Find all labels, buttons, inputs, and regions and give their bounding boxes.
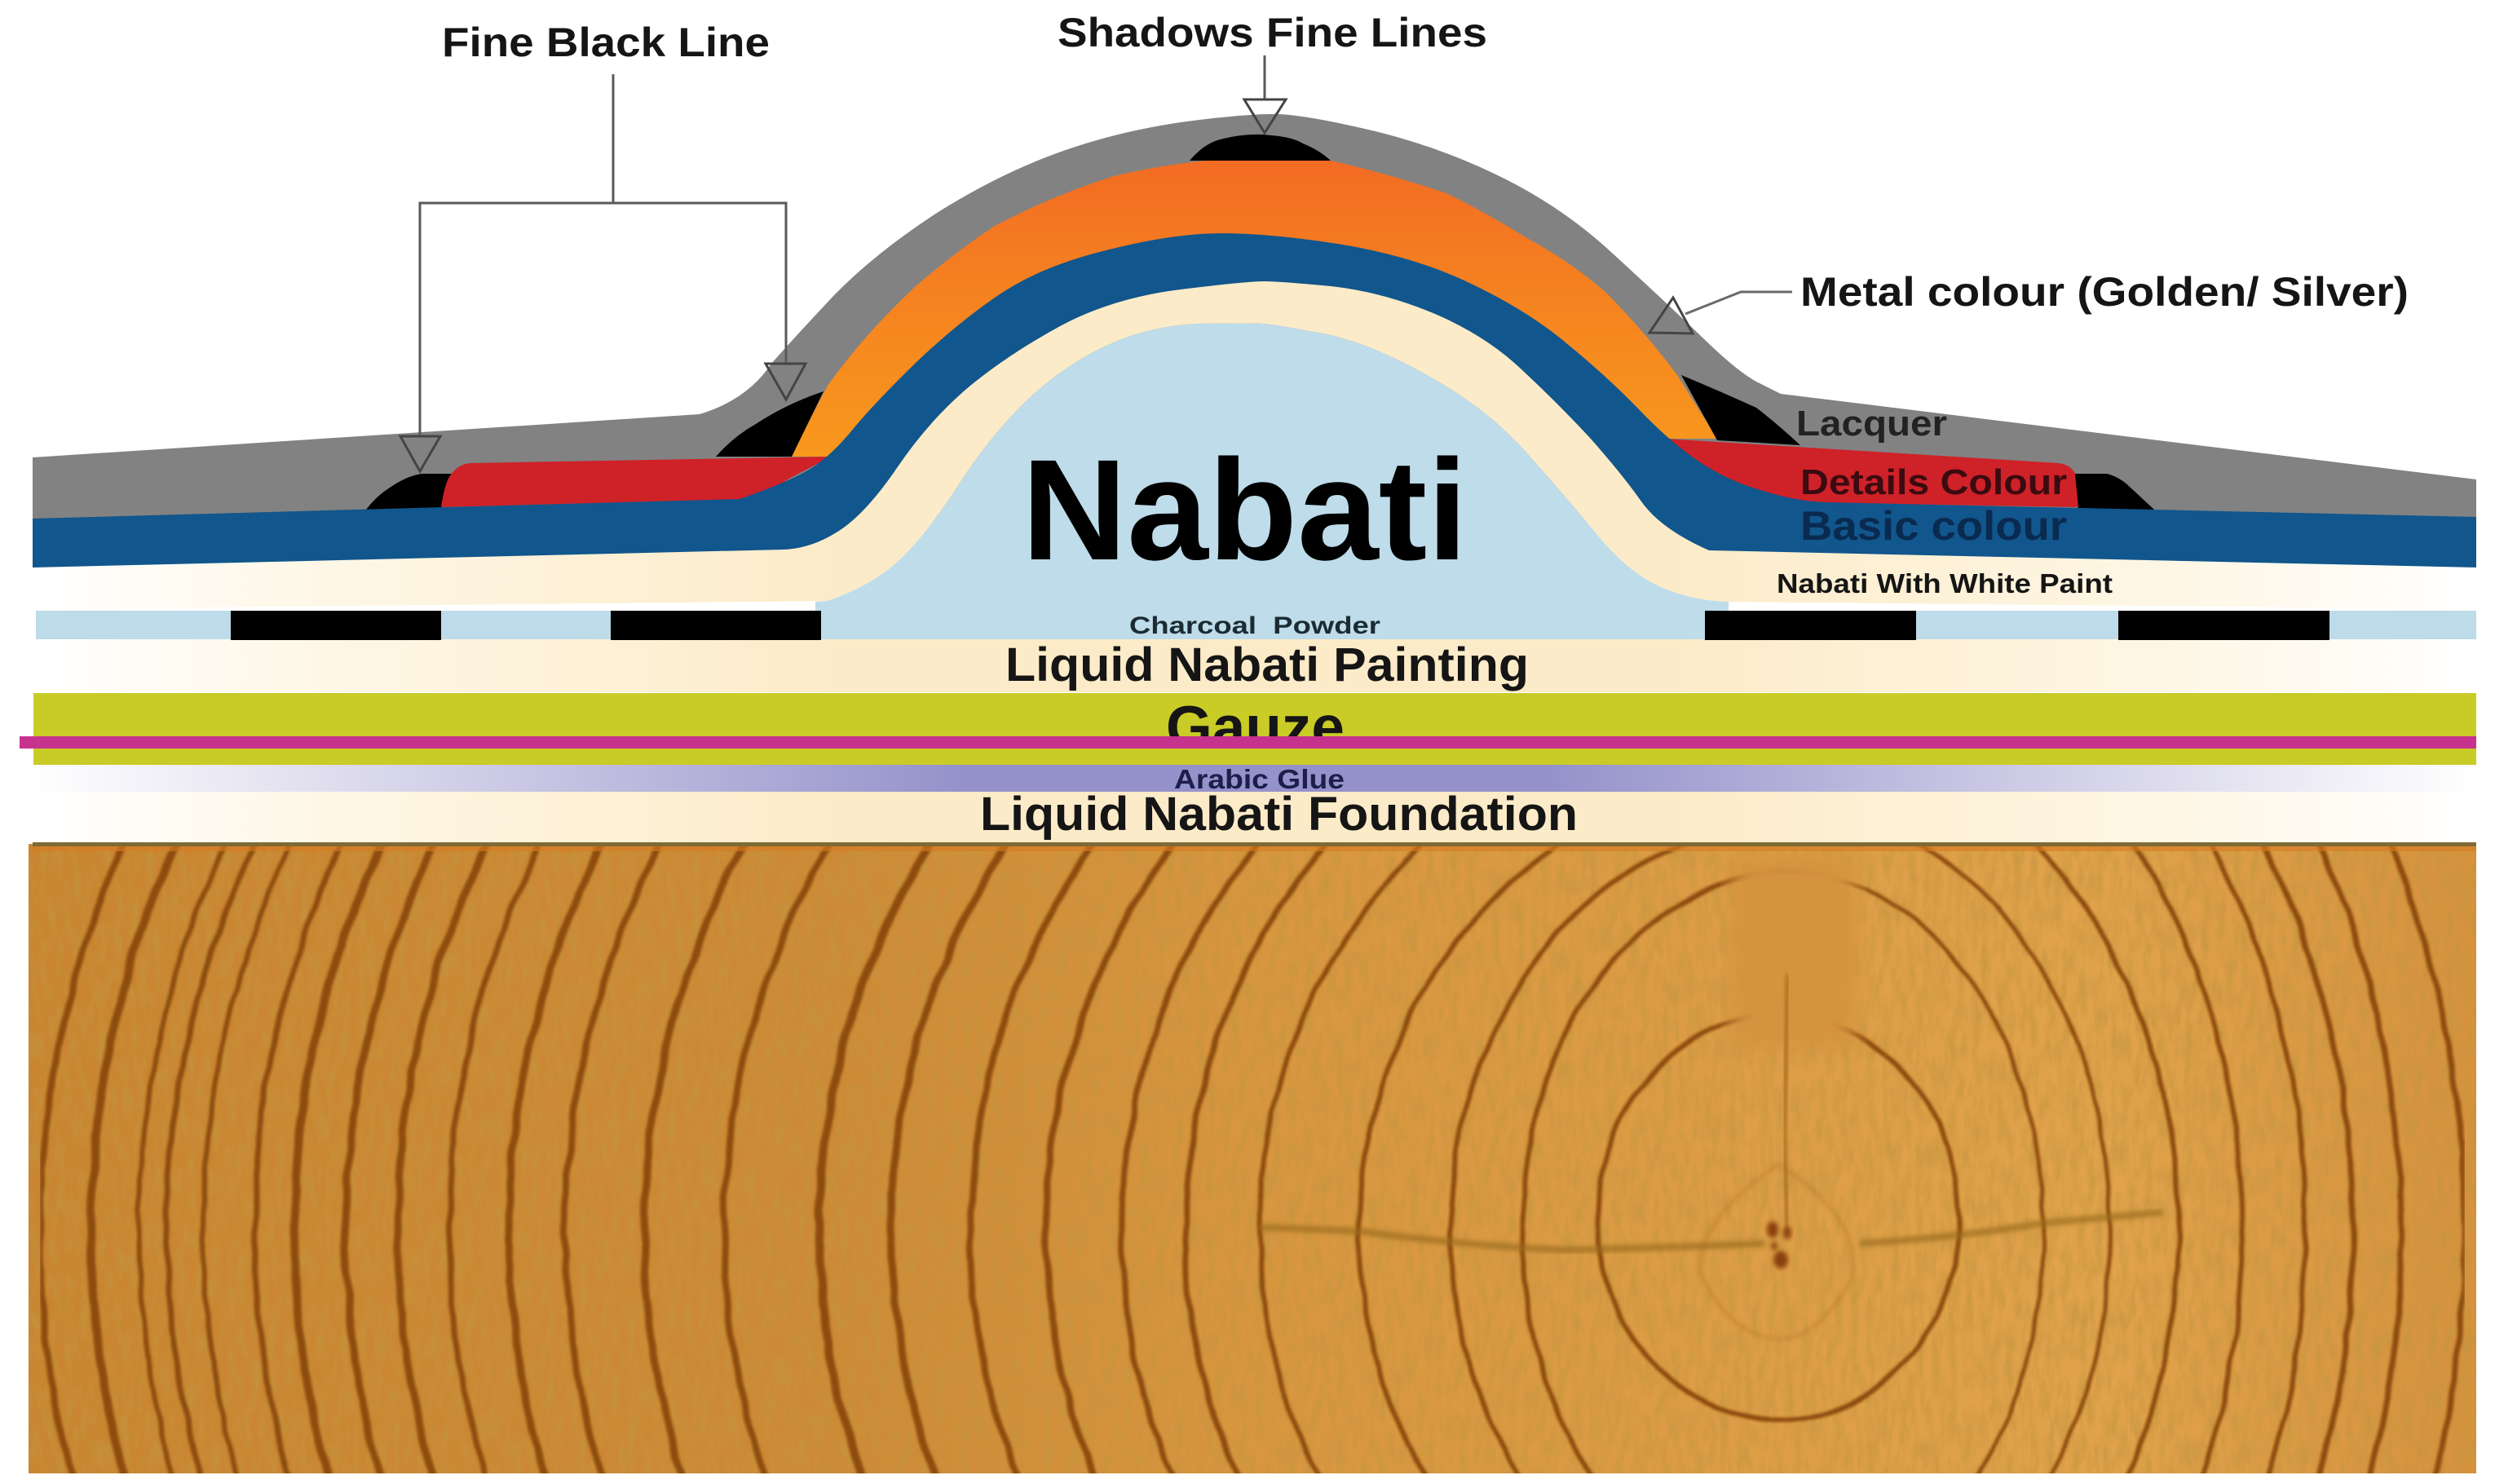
label: Metal colour: Metal colour (Golden/ Silver) <box>1800 269 2409 315</box>
wood top orange stripe <box>33 846 2476 851</box>
layer: arabic glue <box>33 765 2476 792</box>
layer: gauze <box>33 693 2476 765</box>
label: Nabati: Nabati <box>1022 431 1468 590</box>
callout: metal colour arrow <box>1649 292 1792 333</box>
faded band over ring tops <box>1733 856 1855 1048</box>
fine black line: inner left <box>716 391 824 457</box>
label: Charcoal Powder: Charcoal Powder <box>1129 612 1380 639</box>
bar 3 <box>1705 611 1916 640</box>
shadow fine line: top <box>1190 135 1331 161</box>
label: Details Colour: Details Colour <box>1800 462 2067 502</box>
layer: orange gold leaf <box>792 157 1717 457</box>
wood background <box>29 844 2476 1473</box>
callout: fine black line bracket <box>400 74 806 471</box>
magenta line <box>20 736 2476 749</box>
layer: charcoal strip <box>36 611 2476 639</box>
bar 1 <box>231 611 441 640</box>
wood grain texture <box>29 844 2476 1473</box>
label: Arabic Glue: Arabic Glue <box>1174 764 1345 794</box>
pith inner ring <box>1700 1164 1853 1339</box>
label: Nabati With White Paint: Nabati With White Paint <box>1777 568 2113 598</box>
label: Fine Black Line: Fine Black Line <box>442 20 770 65</box>
label: Shadows Fine Lines: Shadows Fine Lines <box>1058 10 1487 55</box>
layer: details colour left <box>441 457 832 507</box>
horizontal crack <box>1260 1212 2162 1250</box>
vertical crack <box>1784 974 1788 1231</box>
layer: liquid nabati foundation <box>33 792 2476 842</box>
layer: basic colour blue <box>33 233 2476 568</box>
charcoal powder bars <box>231 611 2329 640</box>
callout: shadows arrow <box>1244 55 1286 133</box>
bar 4 <box>2118 611 2329 640</box>
label: Basic colour: Basic colour <box>1800 503 2067 549</box>
layer: nabati dome <box>815 323 1729 639</box>
layer: liquid nabati painting <box>33 639 2476 692</box>
bar 2 <box>611 611 821 640</box>
label: Liquid Nabati Foundation: Liquid Nabati Foundation <box>980 788 1578 841</box>
layer: nabati with white paint <box>33 253 2476 609</box>
label: Lacquer: Lacquer <box>1796 404 1947 444</box>
arrow: left <box>400 436 440 471</box>
layer: metal colour grey <box>33 114 2476 522</box>
growth rings <box>40 836 2465 1480</box>
fine black line: outer left <box>366 474 453 510</box>
wood panel <box>29 836 2476 1480</box>
arrow: right <box>766 364 806 400</box>
fine black line: inner right <box>1681 375 1800 445</box>
label: Liquid Nabati Painting: Liquid Nabati Painting <box>1005 638 1529 691</box>
fine black line: outer right <box>2071 474 2154 510</box>
label: Gauze: Gauze <box>1166 695 1345 761</box>
pith knot <box>1767 1221 1791 1269</box>
layer: details colour right <box>1665 439 2078 507</box>
wood top edge <box>33 842 2476 846</box>
